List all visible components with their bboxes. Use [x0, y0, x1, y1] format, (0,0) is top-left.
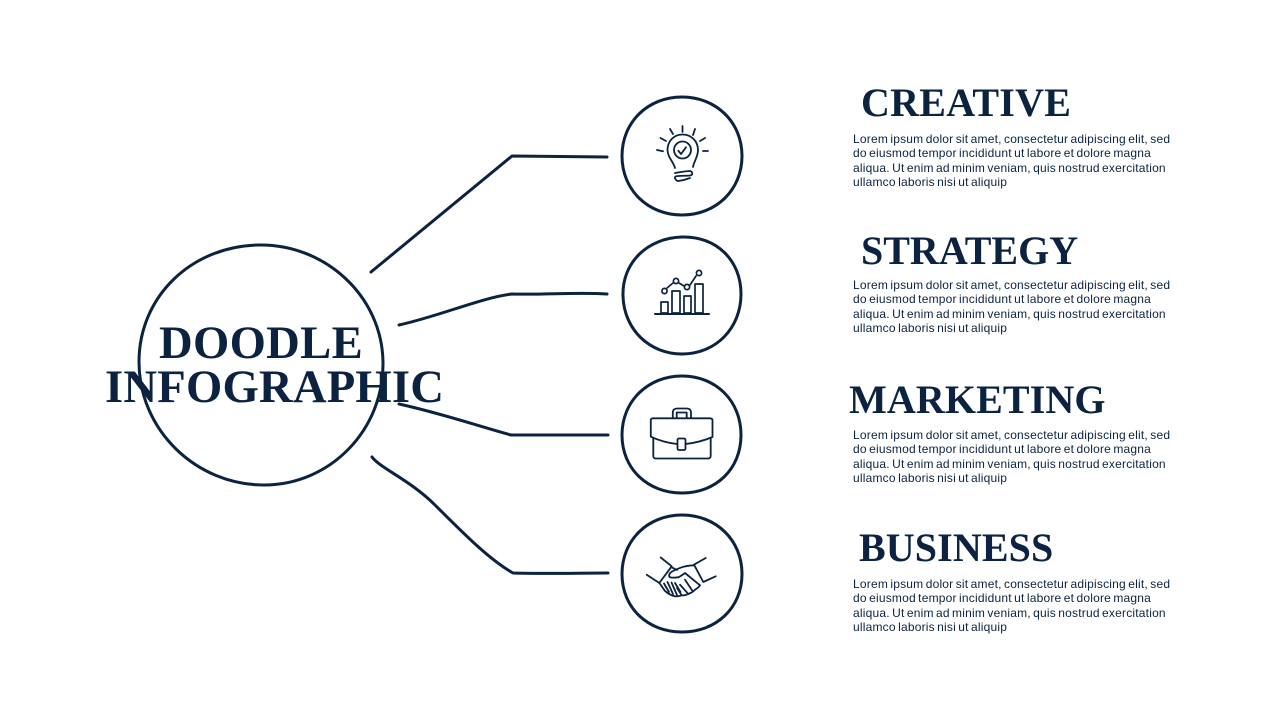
text: strategy: ullamco laboris nisi ut aliquip	[853, 321, 1007, 335]
title: DOODLE	[159, 317, 363, 369]
circle: strategy	[623, 237, 741, 354]
text: business: do eiusmod tempor incididunt ut labore et dolore magna	[853, 591, 1151, 605]
text: creative: Lorem ipsum dolor sit amet, consectetur adipiscing elit, sed	[853, 132, 1170, 146]
main circle	[139, 245, 383, 485]
text: marketing: Lorem ipsum dolor sit amet, consectetur adipiscing elit, sed	[853, 428, 1170, 442]
text: creative	[853, 132, 1170, 189]
connector: to business	[372, 457, 608, 573]
icon: bar chart	[655, 270, 709, 314]
circle: creative	[622, 97, 742, 215]
title: INFOGRAPHIC	[105, 361, 444, 413]
icon: light bulb	[657, 126, 708, 181]
heading: business: BUSINESS	[859, 525, 1053, 570]
connector: to marketing	[399, 404, 608, 435]
connector: to creative	[371, 156, 607, 272]
text: marketing	[853, 428, 1170, 485]
text: marketing: do eiusmod tempor incididunt ut labore et dolore magna	[853, 442, 1151, 456]
text: marketing: ullamco laboris nisi ut aliquip	[853, 471, 1007, 485]
heading: creative: CREATIVE	[861, 80, 1071, 125]
connector: to strategy	[399, 293, 607, 325]
text: strategy	[853, 278, 1170, 335]
icon: briefcase	[651, 408, 712, 458]
text: strategy: aliqua. Ut enim ad minim veniam, quis nostrud exercitation	[853, 307, 1166, 321]
circle: marketing	[622, 376, 741, 493]
title	[105, 317, 444, 413]
text: strategy: Lorem ipsum dolor sit amet, consectetur adipiscing elit, sed	[853, 278, 1170, 292]
text: business: Lorem ipsum dolor sit amet, consectetur adipiscing elit, sed	[853, 577, 1170, 591]
icon: handshake	[647, 558, 716, 596]
text: marketing: aliqua. Ut enim ad minim veniam, quis nostrud exercitation	[853, 457, 1166, 471]
text: creative: aliqua. Ut enim ad minim veniam, quis nostrud exercitation	[853, 161, 1166, 175]
text: creative: do eiusmod tempor incididunt ut labore et dolore magna	[853, 146, 1151, 160]
text: business	[853, 577, 1170, 634]
heading: strategy: STRATEGY	[861, 228, 1078, 273]
circle: business	[622, 515, 742, 632]
text: business: ullamco laboris nisi ut aliquip	[853, 620, 1007, 634]
text: business: aliqua. Ut enim ad minim veniam, quis nostrud exercitation	[853, 606, 1166, 620]
text: strategy: do eiusmod tempor incididunt ut labore et dolore magna	[853, 292, 1151, 306]
heading: marketing: MARKETING	[849, 377, 1106, 422]
text: creative: ullamco laboris nisi ut aliquip	[853, 175, 1007, 189]
